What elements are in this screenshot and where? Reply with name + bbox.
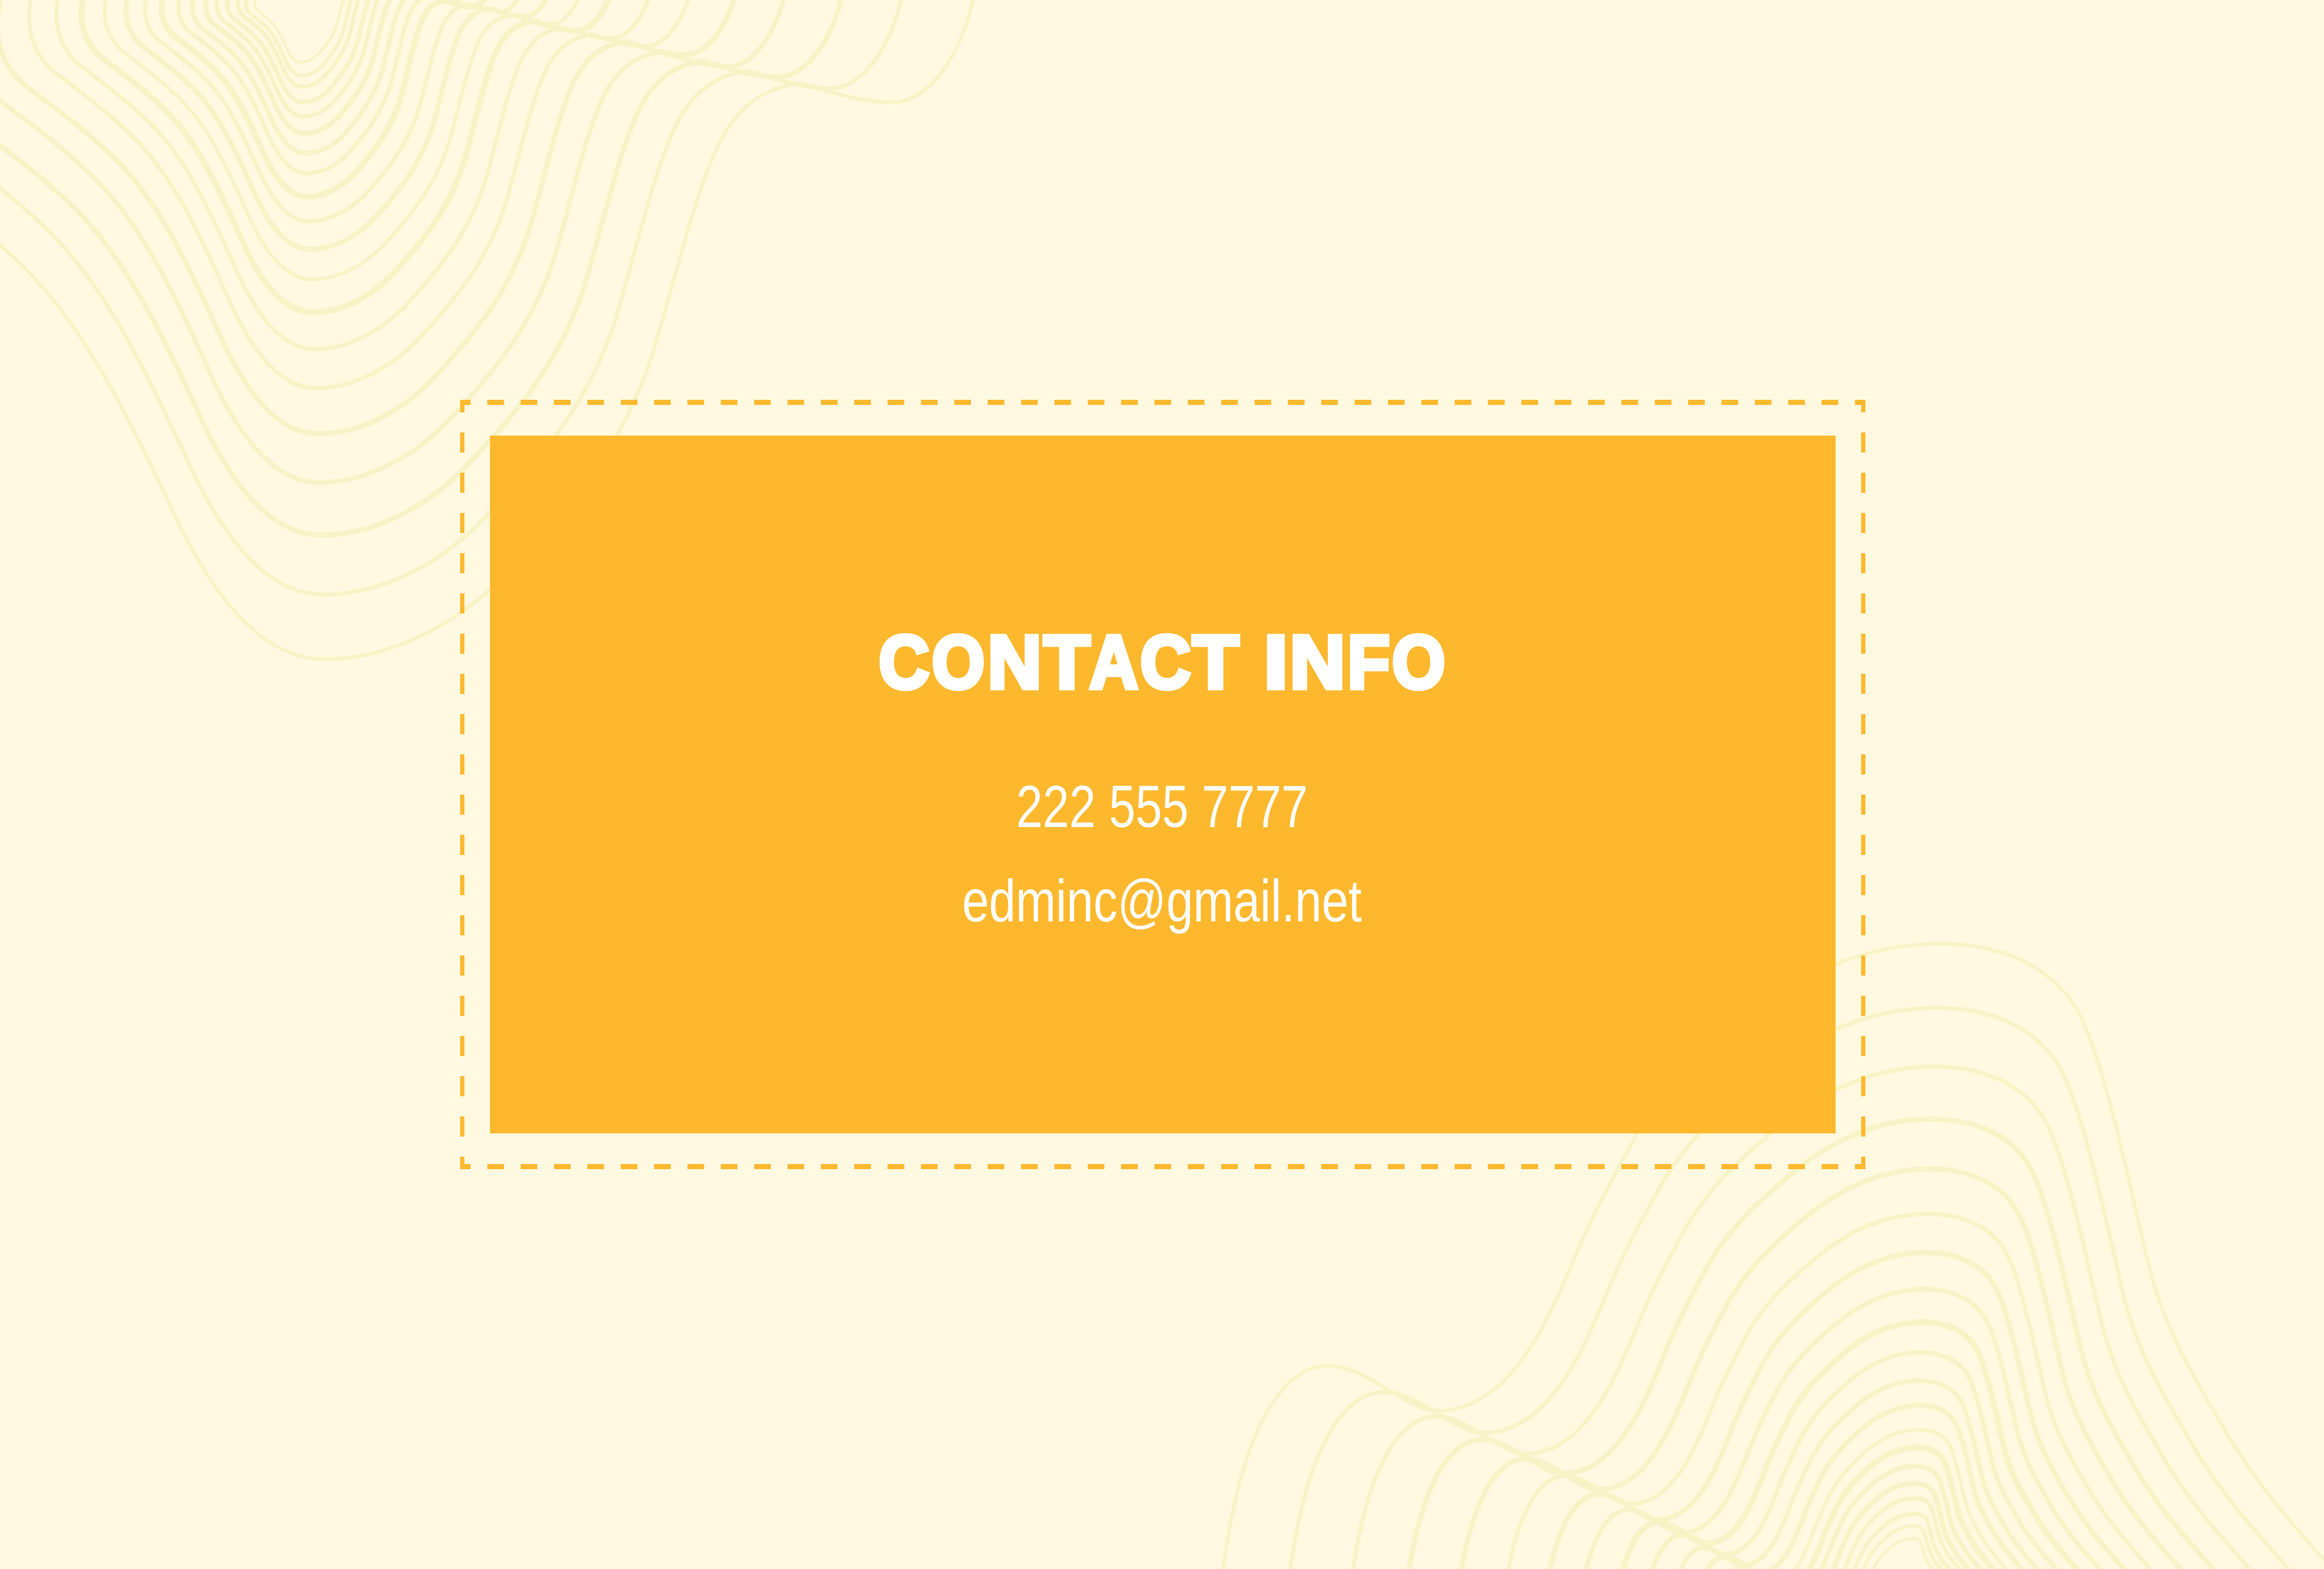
dashed frame (460, 400, 1865, 1169)
heading: N (988, 620, 1042, 704)
wave lines: top left (0, 0, 991, 669)
heading: C (1140, 620, 1191, 704)
heading: N (1290, 620, 1345, 704)
phone number: 222 555 7777 (1016, 773, 1308, 840)
heading: O (1392, 620, 1445, 704)
heading: F (1347, 620, 1390, 704)
heading: C (879, 620, 929, 704)
heading: O (932, 620, 984, 704)
heading: T (1193, 620, 1239, 704)
heading: A (1089, 620, 1138, 704)
orange card background (490, 436, 1835, 1133)
wave lines: bottom right (1201, 907, 2324, 1569)
email address: edminc@gmail.net (962, 867, 1362, 934)
heading: I (1264, 620, 1288, 704)
panel: contact card (460, 400, 1865, 1169)
heading: T (1044, 620, 1090, 704)
